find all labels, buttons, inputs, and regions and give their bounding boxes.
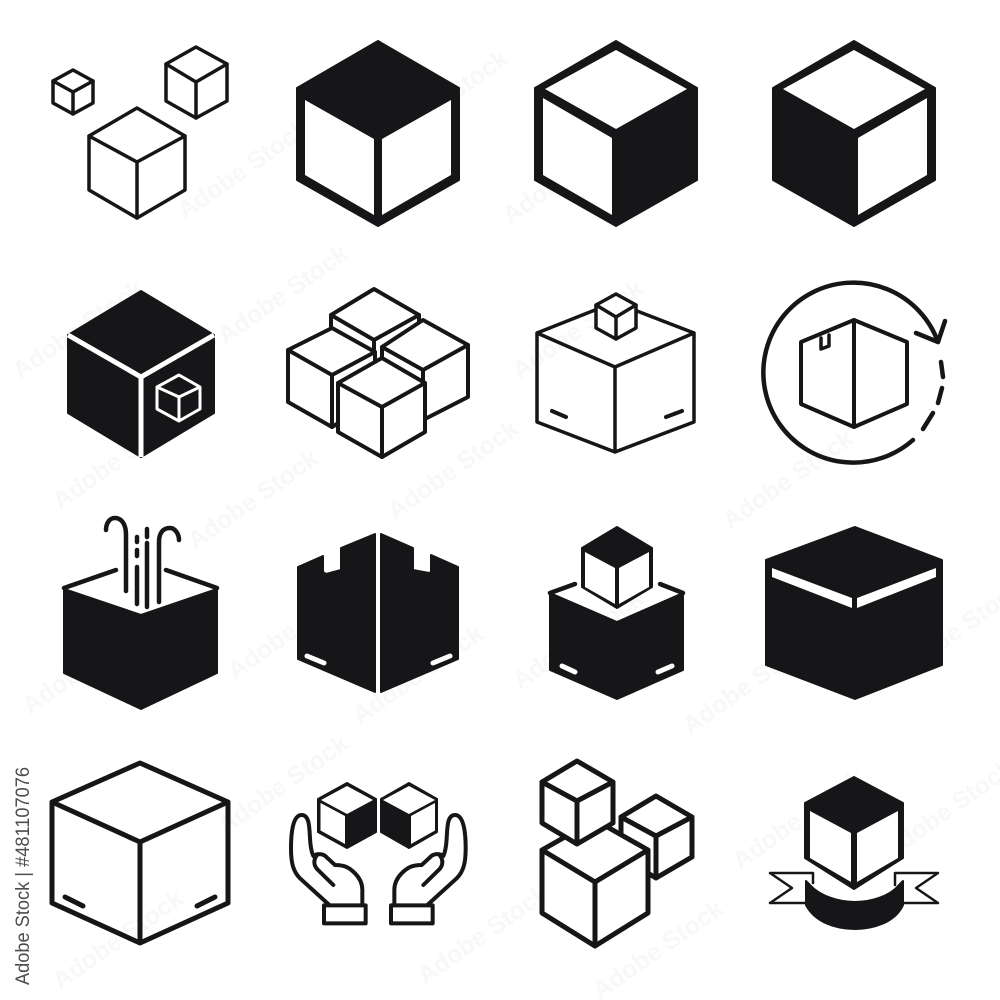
icon: solid black box with white band [766, 527, 942, 699]
background watermark: Adobe Stock [17, 609, 159, 720]
icon: cube with black top [297, 41, 459, 226]
icon: four stacked cubes [288, 289, 468, 457]
background watermark: Adobe Stock [507, 584, 649, 695]
icon: cube with ribbon banner [770, 777, 938, 929]
icon: large outlined box [52, 763, 228, 943]
icon: cube with black right face [535, 41, 697, 226]
background watermark: Adobe Stock [382, 414, 524, 525]
background watermark: Adobe Stock [347, 619, 489, 730]
vertical stock credit text: Adobe Stock | #481107076 [13, 767, 34, 985]
background watermark: Adobe Stock [212, 729, 354, 840]
icon: hands holding two cubes [291, 783, 466, 923]
icon: black box with open flaps [298, 534, 458, 692]
background watermark: Adobe Stock [412, 879, 554, 990]
background watermark: Adobe Stock [212, 239, 354, 350]
background watermark: Adobe Stock [182, 444, 324, 555]
background watermark: Adobe Stock [497, 119, 639, 230]
background watermark: Adobe Stock [47, 884, 189, 995]
background watermark: Adobe Stock [47, 404, 189, 515]
icon: three outlined cubes [53, 47, 227, 218]
background watermark: Adobe Stock [172, 114, 314, 225]
icon: black cube with small cube inside [68, 291, 214, 457]
background watermark: Adobe Stock [222, 574, 364, 685]
background watermark: Adobe Stock [777, 64, 919, 175]
background watermark: Adobe Stock [507, 274, 649, 385]
icon: box with circular arrow [763, 283, 945, 463]
icon: black box with small cube on top [550, 527, 683, 699]
background watermark: Adobe Stock [727, 764, 869, 875]
background watermark: Adobe Stock [372, 44, 514, 155]
background watermark: Adobe Stock [7, 274, 149, 385]
icon: three outlined cubes cluster [542, 761, 692, 946]
icon: outlined box with small cube on top [537, 294, 694, 452]
icon: open black box with rising lines [64, 518, 217, 709]
icon: cube with black left face [773, 41, 935, 226]
background watermark: Adobe Stock [717, 424, 859, 535]
background watermark: Adobe Stock [677, 629, 819, 740]
